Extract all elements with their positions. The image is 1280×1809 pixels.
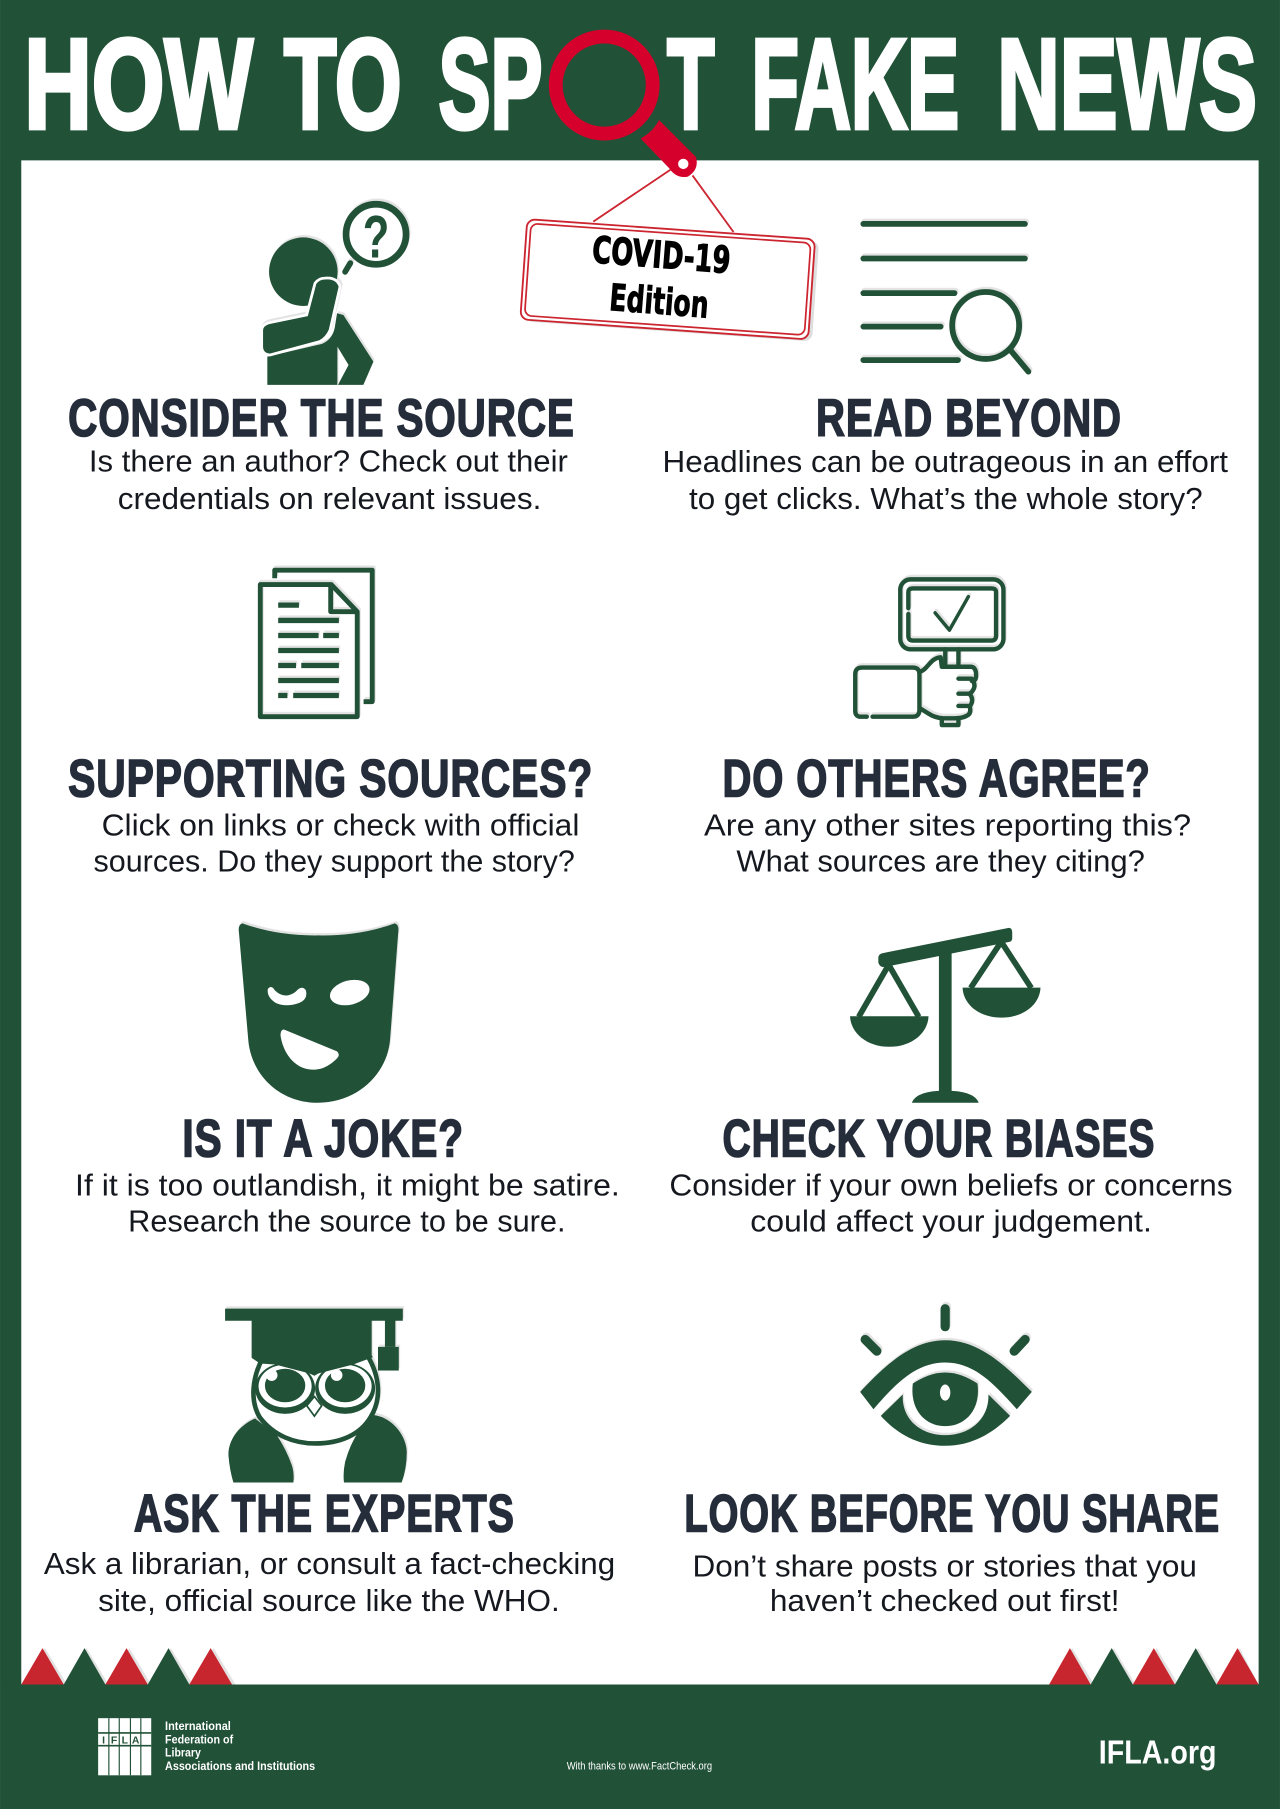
title — [24, 13, 1257, 156]
icon: red magnifying glass — [556, 37, 697, 177]
heading: READ BEYOND — [816, 389, 1122, 448]
panel: consider the source — [68, 203, 575, 516]
icon: eye with rays — [860, 1309, 1032, 1446]
panel: read beyond — [663, 224, 1229, 516]
heading: DO OTHERS AGREE? — [723, 749, 1151, 808]
text: site, official source like the WHO. — [98, 1584, 560, 1618]
website: IFLA.org — [1099, 1735, 1216, 1772]
text: haven’t checked out first! — [770, 1584, 1120, 1618]
organisation name: Federation of — [165, 1732, 234, 1746]
sign board — [520, 219, 819, 341]
heading: SUPPORTING SOURCES? — [68, 749, 593, 808]
IFLA logo — [98, 1718, 151, 1775]
text: Don’t share posts or stories that you — [693, 1550, 1197, 1584]
icon: hand holding check sign — [855, 579, 1003, 725]
title: T — [667, 13, 714, 156]
title: HOW — [24, 13, 253, 156]
panel: look before you share — [684, 1309, 1220, 1618]
icon: documents — [260, 570, 372, 717]
text: If it is too outlandish, it might be satire. — [75, 1169, 620, 1203]
title: TO — [284, 13, 402, 156]
sign text: COVID-19 — [591, 228, 732, 282]
text: Research the source to be sure. — [128, 1204, 566, 1238]
organisation name: Associations and Institutions — [165, 1759, 315, 1773]
text — [89, 444, 568, 516]
text — [693, 1550, 1197, 1618]
text: Are any other sites reporting this? — [704, 809, 1191, 843]
sign: COVID-19 Edition hanging from magnifier — [520, 170, 819, 341]
heading: ASK THE EXPERTS — [134, 1485, 515, 1544]
text — [94, 809, 579, 878]
text — [669, 1169, 1233, 1238]
icon: owl with graduation cap — [225, 1309, 407, 1482]
IFLA logo: F — [111, 1735, 117, 1746]
icon: theatre mask — [239, 923, 398, 1103]
text: to get clicks. What’s the whole story? — [689, 482, 1203, 516]
IFLA logo: I — [102, 1735, 105, 1746]
sign: COVID-19 Edition hanging from magnifier: Edition — [608, 276, 710, 327]
text — [663, 445, 1229, 516]
text: Click on links or check with official — [102, 809, 579, 843]
text: Headlines can be outrageous in an effort — [663, 445, 1229, 479]
text: What sources are they citing? — [736, 844, 1145, 878]
icon: person with question magnifier: ? — [363, 203, 389, 270]
panel: is it a joke — [75, 923, 620, 1238]
icon: balance scale — [850, 928, 1040, 1103]
heading: CONSIDER THE SOURCE — [68, 389, 575, 448]
heading: IS IT A JOKE? — [182, 1109, 464, 1168]
triangles: left bunting — [21, 1648, 235, 1684]
panel: supporting sources — [68, 570, 593, 878]
text — [44, 1547, 615, 1618]
text: could affect your judgement. — [750, 1204, 1152, 1238]
organisation name: International — [165, 1719, 231, 1733]
IFLA logo: A — [132, 1735, 140, 1746]
title: FAKE — [751, 13, 959, 156]
text: Is there an author? Check out their — [89, 444, 568, 478]
IFLA logo: L — [122, 1735, 129, 1746]
panel: check your biases — [669, 928, 1233, 1238]
text: credentials on relevant issues. — [118, 482, 541, 516]
footer — [98, 1718, 1216, 1775]
text: sources. Do they support the story? — [94, 844, 575, 878]
text: Consider if your own beliefs or concerns — [669, 1169, 1233, 1203]
organisation name: Library — [165, 1746, 201, 1760]
icon: person with question magnifier — [262, 203, 406, 385]
strings — [593, 170, 733, 232]
text — [704, 809, 1191, 878]
triangles: right bunting — [1049, 1648, 1259, 1684]
text: Ask a librarian, or consult a fact-checking — [44, 1547, 615, 1581]
panel: ask the experts — [44, 1309, 615, 1618]
panel: do others agree — [704, 579, 1191, 878]
text — [75, 1169, 620, 1238]
title: SP — [439, 13, 542, 156]
thanks line: With thanks to www.FactCheck.org — [567, 1760, 712, 1772]
icon: text lines with magnifier — [863, 224, 1028, 372]
organisation name — [165, 1719, 315, 1773]
